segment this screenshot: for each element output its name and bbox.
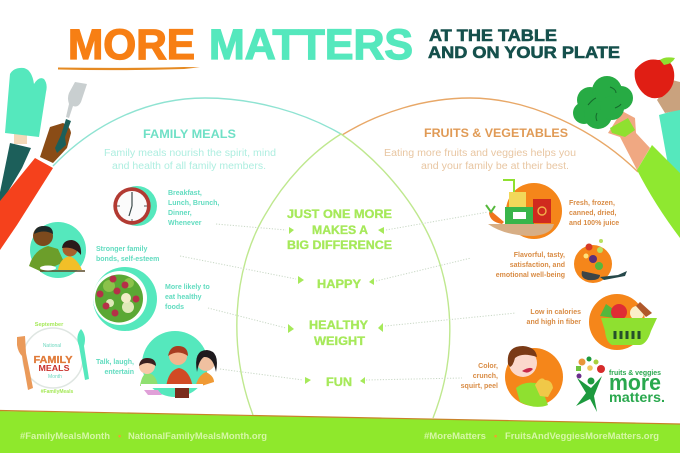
logo: fruits and veggies more matters [576,356,665,412]
icon: child eating a banana [505,346,563,407]
dark sleeve [0,143,31,205]
tagline: AND ON YOUR PLATE [428,43,620,62]
text: meal times: Lunch, Brunch, [168,200,219,207]
message: healthy weight: HEALTHY [309,318,368,332]
footer text left: NationalFamilyMealsMonth.org [128,431,267,441]
title word: MATTERS: MATTERS [209,22,413,69]
message: just one more: BIG DIFFERENCE [287,238,392,252]
badge: family meals month: Month [48,374,62,380]
text: healthy foods: eat healthy [165,294,202,301]
badge: family meals month: September [35,322,64,328]
intro text: Eating more fruits and veggies helps you [384,148,576,159]
panel: fruits and vegetables [384,128,665,412]
message: fun: FUN [326,375,352,389]
intro text: and health of all family members. [112,161,266,172]
message: healthy weight: WEIGHT [314,334,366,348]
text: flavorful: emotional well-being [496,272,565,279]
teal sleeve [659,109,680,175]
text: low in calories: and high in fiber [527,319,581,326]
icon: oven mitt [5,68,47,137]
tagline [428,26,620,62]
icon: apple [635,57,675,98]
icon: clock [113,186,157,226]
icon: basket of produce [589,294,657,350]
footer text left [20,431,267,441]
message: just one more: JUST ONE MORE [287,207,392,221]
left illustration: arms with oven mitt and fork [0,68,87,250]
panel: family meals [17,129,276,398]
icon: fork [17,336,33,390]
text: color crunch: Color, [478,363,498,370]
tagline: AT THE TABLE [429,26,557,45]
footer text left: #FamilyMealsMonth [20,431,110,441]
title [58,22,413,70]
text: healthy foods: More likely to [165,284,210,291]
footer text right [424,431,659,441]
skin arm and hand [608,111,650,170]
venn arc: family meals [53,98,341,166]
logo: fruits and veggies more matters: fruits & veggies [609,370,661,377]
text: meal times: Whenever [168,220,202,227]
title word: MORE: MORE [68,22,195,69]
footer text right: • [494,431,497,441]
text: fresh frozen: Fresh, frozen, [569,200,615,207]
icon: fork [66,82,87,118]
intro text [104,148,276,172]
text: healthy foods: foods [165,304,184,311]
heading: FRUITS & VEGETABLES [424,128,568,140]
icon: salad [93,267,157,331]
text: color crunch: squirt, peel [461,383,498,390]
dotted connector arrows [180,212,516,384]
text: fresh frozen: and 100% juice [569,220,619,227]
icon: spoon [77,329,89,380]
text: flavorful: Flavorful, tasty, [514,252,565,259]
venn arc: fruits and vegetables [342,98,638,172]
logo figure [576,356,605,412]
right illustration: arms with broccoli and apple [573,57,680,238]
text: fresh frozen: canned, dried, [569,210,617,217]
footer band [0,410,680,453]
badge: family meals month [17,322,89,395]
text: meal times: Dinner, [168,210,192,217]
text: flavorful [496,252,565,279]
logo: fruits and veggies more matters: matters. [609,389,665,405]
green sleeve [637,145,680,238]
venn arch: overlap [237,134,450,418]
text: low in calories: Low in calories [530,309,581,316]
brown hand [40,123,71,163]
message: just one more [287,207,392,252]
badge: family meals month: MEALS [38,363,70,373]
footer text right: FruitsAndVeggiesMoreMatters.org [505,431,659,441]
text: flavorful: satisfaction, and [510,262,565,269]
text: color crunch: crunch, [473,373,498,380]
text: talk laugh [96,359,134,376]
tan hand [657,80,680,113]
icon: juice and canned food [486,180,562,239]
text: healthy foods [165,284,210,311]
icon: broccoli [573,76,635,137]
icon: family at table [139,331,217,398]
text: talk laugh: Talk, laugh, [96,359,134,366]
logo: fruits and veggies more matters: more [609,370,661,395]
text: meal times: Breakfast, [168,190,202,197]
text: talk laugh: entertain [104,369,134,376]
cuff [14,134,27,144]
message: happy: HAPPY [317,277,361,291]
intro text: Family meals nourish the spirit, mind [104,148,276,159]
badge: family meals month: National [43,343,61,349]
panel: center overlap messages [287,207,392,389]
intro text: and your family be at their best. [421,161,569,172]
icon: vegetables in pan [574,239,627,283]
text: stronger bonds: bonds, self-esteem [96,256,159,263]
message: healthy weight [309,318,368,348]
icon: parent and child [29,222,86,278]
intro text [384,148,576,172]
fork handle [55,119,71,153]
text: low in calories [527,309,581,326]
footer text right: #MoreMatters [424,431,486,441]
red sleeve [0,158,53,250]
text: meal times [168,190,219,227]
badge: family meals month: FAMILY [34,354,72,366]
text: color crunch [461,363,498,390]
text: fresh frozen [569,200,619,227]
text: stronger bonds: Stronger family [96,246,147,253]
footer text left: • [118,431,121,441]
title underline brush stroke [58,67,200,70]
message: just one more: MAKES A [312,223,368,237]
heading: FAMILY MEALS [143,129,236,141]
text: stronger bonds [96,246,159,263]
badge: family meals month: #FamilyMeals [41,389,73,395]
